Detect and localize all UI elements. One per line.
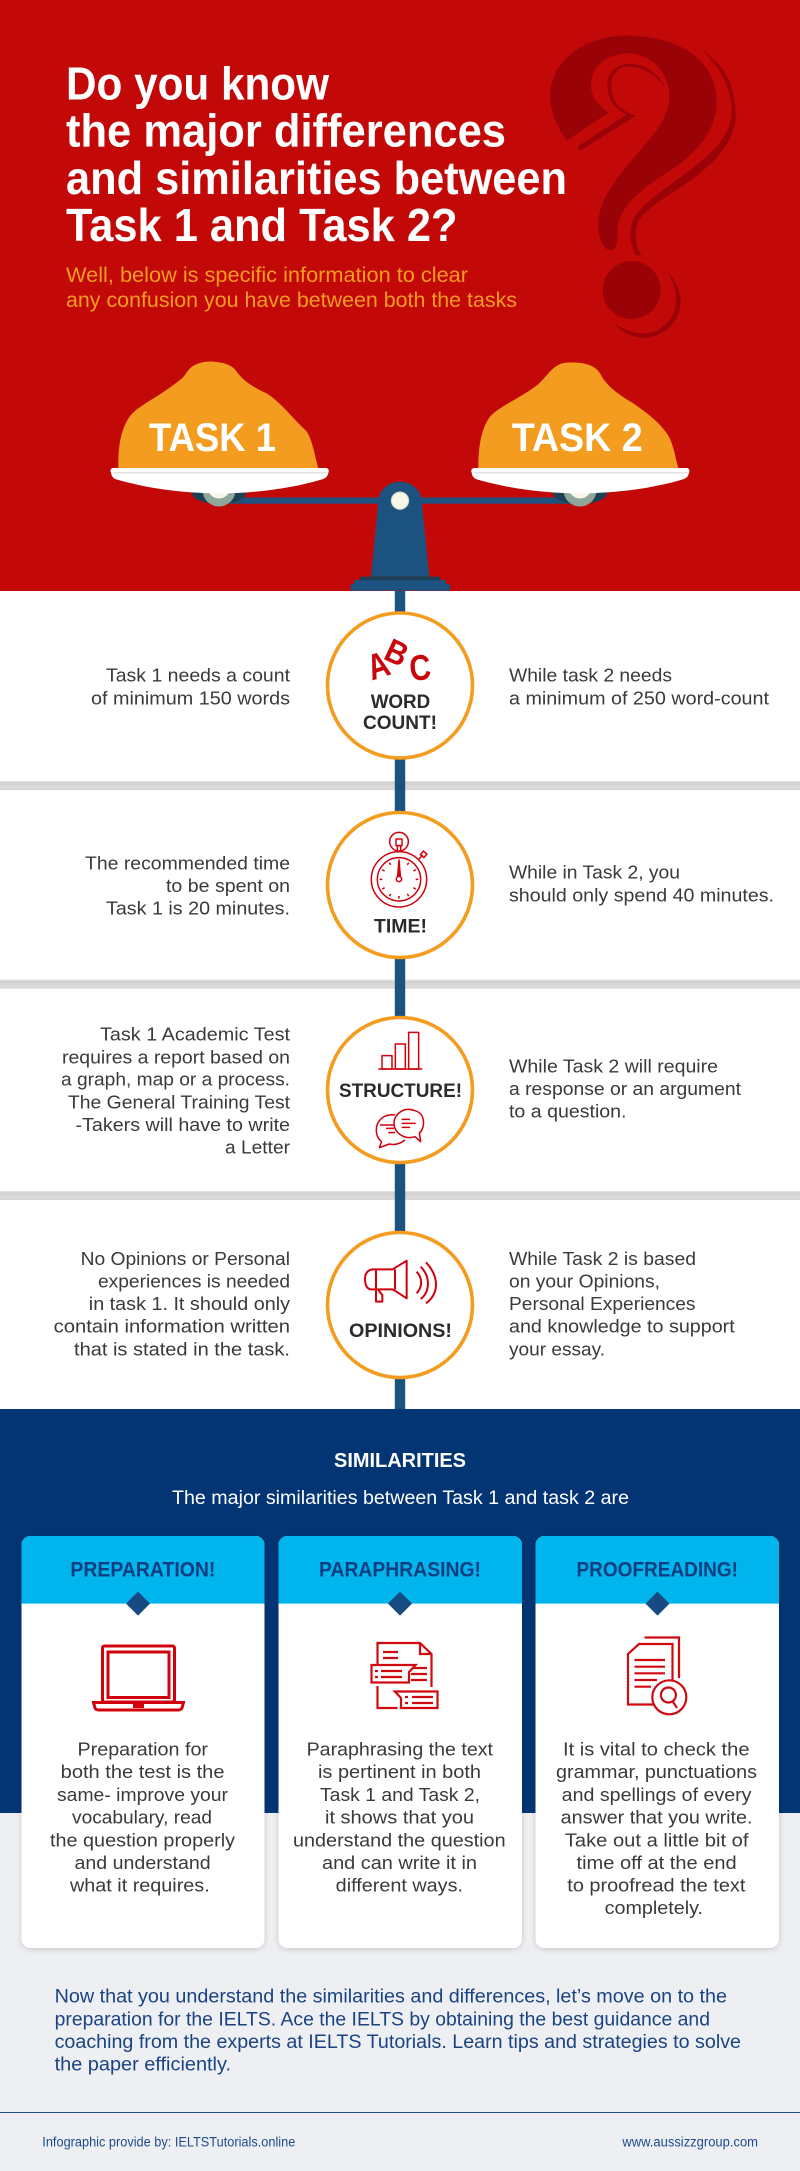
title: Do you know (66, 58, 329, 110)
timeline stem (395, 591, 405, 1409)
text: task 1 structure: a Letter (225, 1137, 290, 1158)
footer: www.aussizzgroup.com (621, 2134, 758, 2150)
icon: ABC: C (407, 646, 433, 689)
diamond marker (646, 1592, 670, 1616)
card text: same- improve your (57, 1784, 228, 1805)
label: word count: WORD (371, 692, 430, 713)
card text: what it requires. (69, 1875, 210, 1896)
text: task 1 structure: a graph, map or a process. (61, 1069, 290, 1090)
text: task 2 structure: to a question. (509, 1101, 626, 1122)
text: task 1 opinions: No Opinions or Personal (81, 1248, 290, 1269)
text: task 1 opinions: that is stated in the task. (74, 1338, 290, 1359)
text: task 2 opinions: and knowledge to support (509, 1316, 735, 1337)
subtitle (66, 264, 517, 312)
diamond marker (126, 1592, 150, 1616)
card: paraphrasing (278, 1536, 522, 1948)
text: task 2 opinions: on your Opinions, (509, 1271, 660, 1292)
card text (293, 1739, 506, 1896)
circle: time (328, 812, 472, 958)
text: task 2 opinions: your essay. (509, 1338, 605, 1359)
circle: structure (328, 1018, 472, 1162)
card text (556, 1739, 757, 1918)
icon: stopwatch (371, 832, 427, 907)
card heading: PARAPHRASING! (319, 1559, 481, 1582)
title: Task 1 and Task 2? (66, 199, 458, 251)
card text: to proofread the text (567, 1875, 745, 1896)
circle: word count (328, 613, 472, 758)
card text: time off at the end (576, 1852, 737, 1873)
text: task 2 opinions: Personal Experiences (509, 1293, 696, 1314)
icon: bar chart (378, 1032, 422, 1069)
closing paragraph: preparation for the IELTS. Ace the IELTS by obtaining the best guidance and (55, 2009, 710, 2030)
icon: document with magnifier (628, 1638, 686, 1714)
text: task 1 word count: of minimum 150 words (91, 687, 290, 708)
card text: Task 1 and Task 2, (320, 1784, 480, 1805)
text: task 2 time: should only spend 40 minutes. (509, 884, 774, 905)
scale pan: task 2 (471, 362, 689, 506)
text: task 1 time (85, 852, 290, 919)
icon: question mark (550, 36, 736, 338)
heading: similarities: SIMILARITIES (334, 1450, 466, 1472)
text: task 1 time: The recommended time (85, 852, 290, 873)
scale pillar (351, 482, 450, 591)
card text: vocabulary, read (72, 1806, 212, 1827)
scale pan: task 2: TASK 2 (512, 416, 643, 460)
row: structure (61, 1018, 741, 1162)
text: task 1 structure (61, 1024, 290, 1158)
text: task 2 word count (509, 665, 769, 708)
text: task 1 word count: Task 1 needs a count (106, 665, 290, 686)
text: task 1 opinions (54, 1248, 291, 1359)
panel: differences (0, 591, 800, 1409)
row: word count (91, 613, 769, 758)
text: task 1 structure: -Takers will have to write (76, 1114, 290, 1135)
card heading: PREPARATION! (70, 1559, 215, 1582)
subtitle: any confusion you have between both the tasks (66, 289, 517, 312)
icon: ABC: B (379, 632, 414, 674)
card text: and can write it in (322, 1852, 477, 1873)
diamond marker (388, 1592, 412, 1616)
icon: laptop (94, 1646, 184, 1710)
text: task 2 opinions: While Task 2 is based (509, 1248, 696, 1269)
label: word count (363, 692, 437, 734)
icon: documents (372, 1643, 438, 1708)
subtitle: Well, below is specific information to clear (66, 264, 468, 287)
closing paragraph: the paper efficiently. (55, 2054, 231, 2076)
card text: it shows that you (325, 1806, 474, 1827)
icon: ABC: A (362, 643, 395, 688)
row: opinions (54, 1232, 735, 1378)
row: time (85, 812, 774, 958)
text: task 1 structure: requires a report based on (62, 1046, 290, 1067)
card text: the question properly (50, 1829, 236, 1850)
label: word count: COUNT! (363, 713, 437, 734)
text: task 1 structure: The General Training Test (68, 1091, 290, 1112)
text: task 2 time (509, 862, 774, 905)
card text: understand the question (293, 1829, 506, 1850)
text: task 2 opinions (509, 1248, 735, 1359)
icon: megaphone (365, 1261, 436, 1303)
closing paragraph: Now that you understand the similarities and differences, let’s move on to the (55, 1987, 727, 2008)
text: task 1 opinions: contain information written (54, 1316, 290, 1337)
card text: It is vital to check the (563, 1739, 750, 1760)
card text: Preparation for (78, 1739, 208, 1760)
text: task 1 structure: Task 1 Academic Test (100, 1024, 290, 1045)
card text: answer that you write. (561, 1806, 752, 1827)
scale pan: task 1: TASK 1 (149, 416, 276, 460)
panel: red header (0, 0, 800, 591)
text: task 2 word count: a minimum of 250 word-count (509, 687, 769, 708)
card text: is pertinent in both (318, 1761, 481, 1782)
card text: and understand (74, 1852, 211, 1873)
text: task 1 opinions: in task 1. It should only (89, 1293, 291, 1314)
icon: chat bubbles (376, 1109, 424, 1148)
title (66, 58, 567, 251)
text: task 2 word count: While task 2 needs (509, 665, 672, 686)
text: task 2 structure: While Task 2 will require (509, 1055, 718, 1076)
card text: Paraphrasing the text (307, 1739, 493, 1760)
circle: opinions (328, 1232, 472, 1378)
text: task 2 structure: a response or an argument (509, 1078, 741, 1099)
text: task 1 word count (91, 665, 290, 708)
text: task 1 opinions: experiences is needed (98, 1271, 290, 1292)
scale beam (219, 498, 580, 504)
title: and similarities between (66, 152, 567, 204)
card: proofreading (536, 1536, 779, 1948)
card text: completely. (605, 1897, 703, 1918)
icon: ABC (362, 632, 433, 689)
card text: Take out a little bit of (565, 1829, 749, 1850)
subheading: The major similarities between Task 1 and task 2 are (172, 1488, 629, 1509)
label: structure: STRUCTURE! (339, 1081, 462, 1102)
card heading: PROOFREADING! (576, 1559, 738, 1582)
panel: similarities (0, 1409, 800, 1948)
footer: Infographic provide by: IELTSTutorials.online (42, 2134, 295, 2150)
title: the major differences (66, 104, 506, 156)
card text: both the test is the (61, 1761, 225, 1782)
footer (42, 2134, 758, 2150)
label: time: TIME! (374, 917, 427, 938)
text: task 2 structure (509, 1055, 741, 1122)
closing paragraph: coaching from the experts at IELTS Tutorials. Learn tips and strategies to solve (55, 2032, 741, 2053)
card text (50, 1739, 236, 1896)
text: task 1 time: Task 1 is 20 minutes. (106, 898, 290, 919)
card text: and spellings of every (562, 1784, 752, 1805)
label: opinions: OPINIONS! (349, 1321, 452, 1342)
scale pan: task 1 (110, 361, 329, 506)
text: task 1 time: to be spent on (166, 875, 290, 896)
text: task 2 time: While in Task 2, you (509, 862, 680, 883)
card text: different ways. (336, 1875, 463, 1896)
card: preparation (22, 1536, 264, 1948)
card text: grammar, punctuations (556, 1761, 757, 1782)
closing paragraph (55, 1987, 741, 2076)
